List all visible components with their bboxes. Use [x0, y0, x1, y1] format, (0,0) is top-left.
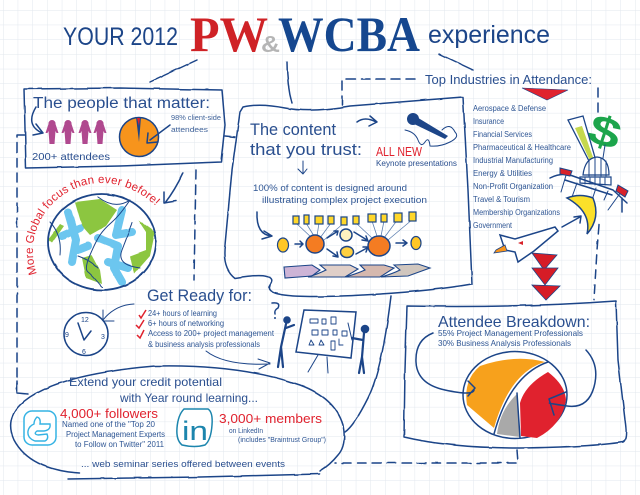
arrow: to pie [147, 125, 170, 143]
arrow: to clock [103, 304, 134, 321]
icon: red triangle [522, 88, 568, 100]
linkedin stats: (includes "Braintrust Group") [238, 435, 326, 444]
title: WCBA [278, 6, 420, 62]
linkedin stats: 3,000+ members [219, 412, 322, 426]
icon: twitter badge [24, 411, 56, 445]
icon: clock: 9 [65, 332, 69, 339]
icon: arrow to people [32, 107, 43, 135]
panel: the content [224, 97, 472, 297]
content description: 100% of content is designed around [253, 183, 407, 193]
industries list: Membership Organizations [473, 208, 560, 217]
industries list: Pharmaceutical & Healthcare [473, 143, 572, 152]
panel: extend your credit potential [11, 366, 344, 479]
heading: get ready: Get Ready for: [147, 286, 252, 305]
heading: people: The people that matter: [33, 95, 210, 112]
breakdown percentages: 55% Project Management Professionals [438, 328, 583, 338]
icon: clock [64, 312, 108, 356]
arrow: to microphone [357, 116, 377, 126]
checklist [136, 309, 275, 349]
arrow: to red slice [549, 350, 596, 415]
industries list: Industrial Manufacturing [473, 156, 553, 165]
icon: red downward arrows [532, 253, 560, 300]
content description: illustrating complex project execution [262, 195, 427, 205]
all new callout: ALL NEW [376, 145, 422, 159]
checklist: 24+ hours of learning [148, 309, 217, 318]
breakdown percentages: 30% Business Analysis Professionals [438, 338, 571, 348]
client-side label: 98% client-side [171, 113, 221, 122]
industries list: Aerospace & Defense [473, 104, 547, 113]
twitter stats [60, 407, 165, 449]
twitter stats: Project Management Experts [66, 430, 165, 439]
pie chart: attendee breakdown [463, 352, 567, 438]
heading: content: The content [250, 121, 336, 139]
twitter stats: 4,000+ followers [60, 407, 158, 421]
title: experience [428, 21, 550, 49]
icon: yellow crescent [567, 196, 596, 234]
arrow: down [298, 161, 307, 174]
panel: attendee breakdown [404, 301, 626, 448]
icon: linkedin badge: in [182, 416, 208, 446]
panel: the people that matter [24, 88, 225, 168]
arrow: people to globe [164, 173, 183, 203]
heading: top industries: Top Industries in Attendance: [425, 72, 592, 87]
industries list: Travel & Tourism [473, 195, 530, 204]
title: PW [190, 6, 268, 62]
industries list: Government [473, 221, 513, 230]
client-side label: attendees [171, 125, 208, 134]
pie chart: client-side share [120, 117, 158, 156]
panel: get ready [64, 286, 391, 432]
oceans and land [62, 210, 132, 282]
globe [48, 194, 156, 290]
industries list: Financial Services [473, 130, 532, 139]
process flow diagram [278, 212, 421, 258]
panel: top industries [425, 72, 628, 300]
industries list: Energy & Utilities [473, 169, 532, 178]
icon: space shuttle [494, 227, 558, 262]
heading: attendee breakdown: Attendee Breakdown: [438, 314, 590, 331]
connector lines [17, 54, 599, 463]
icon: dollar sign: $ [582, 104, 627, 159]
chevron timeline [284, 264, 430, 278]
panel: the content: that you trust: [250, 141, 362, 159]
title: YOUR 2012 [63, 23, 178, 51]
icon: clock: 3 [101, 334, 105, 341]
arrow: to orange slice [416, 333, 475, 396]
linkedin stats [219, 412, 326, 444]
heading: extend: Extend your credit potential [69, 375, 222, 389]
icon: capitol building [550, 145, 628, 212]
checklist: 6+ hours of networking [148, 319, 224, 328]
checklist: & business analysis professionals [148, 340, 260, 349]
icon: presenter at whiteboard [272, 303, 369, 373]
icon: microphone [405, 113, 457, 146]
attendees label: 200+ attendees [32, 151, 110, 163]
industries list: Insurance [473, 117, 504, 126]
icon: clock: 6 [82, 349, 86, 356]
arrow: to presenter [206, 351, 270, 369]
arrow: into flow [257, 212, 272, 239]
industries list: Non-Profit Organization [473, 182, 553, 191]
keynote label: Keynote presentations [376, 158, 457, 168]
web seminar note: ... web seminar series offered between events [81, 459, 285, 470]
title: & [261, 31, 280, 57]
icon: clock: 12 [81, 317, 89, 324]
title [63, 6, 550, 62]
icon: four people [46, 120, 106, 144]
twitter stats: Named one of the "Top 20 [62, 420, 156, 429]
heading: extend: with Year round learning... [119, 391, 258, 405]
linkedin stats: on LinkedIn [229, 426, 263, 435]
icon: linkedin badge [177, 409, 212, 446]
icon: test tube [568, 116, 596, 163]
twitter stats: to Follow on Twitter" 2011 [75, 440, 165, 449]
checklist: Access to 200+ project management [148, 329, 275, 338]
globe caption: More Global focus than ever before! [26, 176, 160, 276]
icon: arrow to crescent [562, 216, 581, 227]
